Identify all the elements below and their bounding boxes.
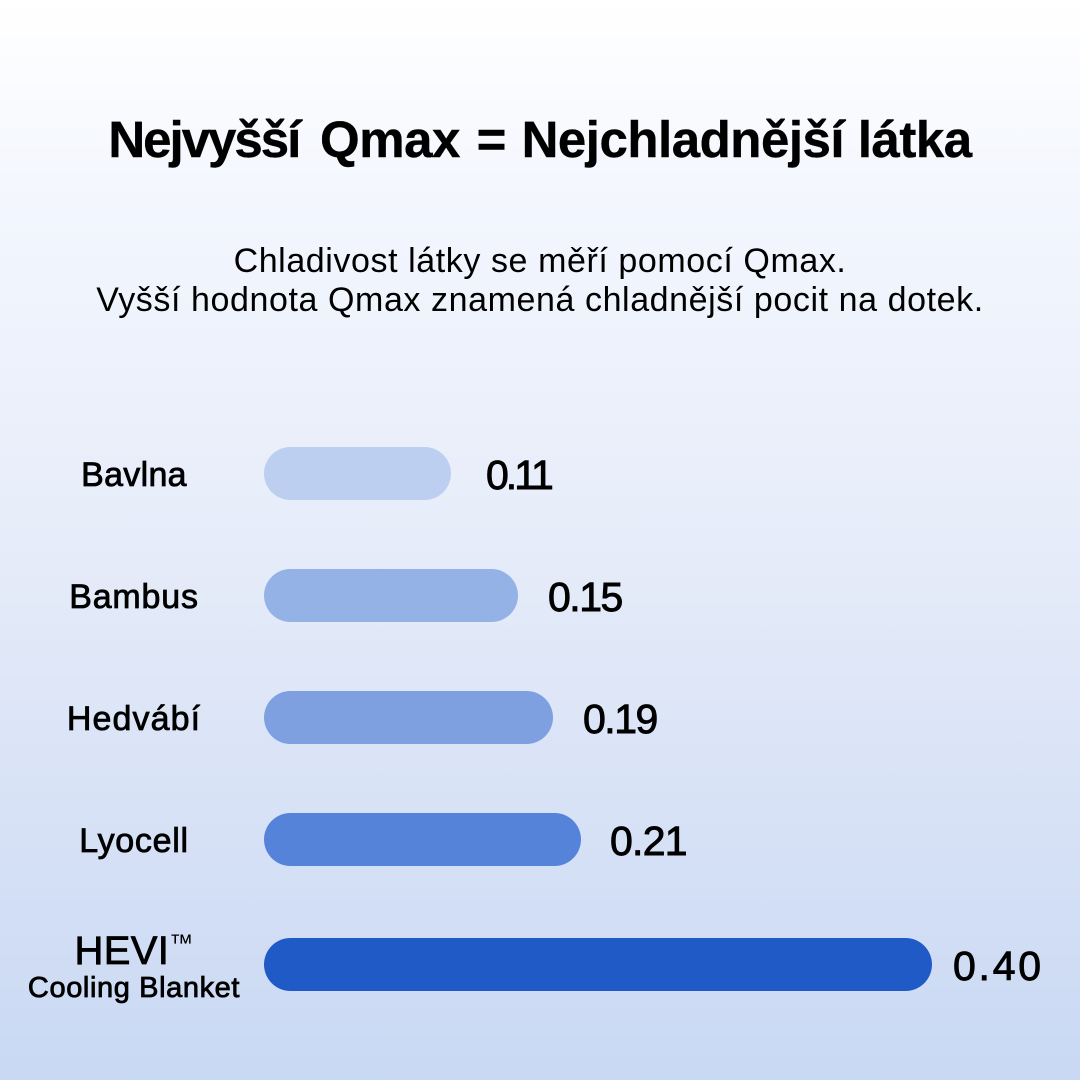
bar: Hedvábí	[264, 691, 553, 744]
value: 0.21: 0.21	[610, 818, 687, 864]
label: Hedvábí: Hedvábí	[67, 700, 201, 738]
row: Hedvábí	[67, 691, 657, 744]
label: HEVI Cooling Blanket	[28, 929, 240, 1004]
label: Bavlna: Bavlna	[81, 456, 187, 494]
row: Lyocell	[79, 813, 687, 866]
label: Lyocell: Lyocell	[79, 822, 189, 860]
bar: Lyocell	[264, 813, 581, 866]
bar: HEVI	[264, 938, 932, 991]
row: Bavlna	[81, 447, 552, 500]
intro text: Vyšší hodnota Qmax znamená chladnější pocit na dotek.	[96, 281, 984, 319]
label: HEVI Cooling Blanket: HEVI™	[75, 929, 193, 973]
label: Bambus: Bambus	[69, 578, 199, 616]
label: HEVI Cooling Blanket: Cooling Blanket	[28, 972, 240, 1004]
intro text	[96, 242, 984, 319]
bar: Bavlna	[264, 447, 451, 500]
intro text: Chladivost látky se měří pomocí Qmax.	[234, 242, 846, 280]
title: Nejvyšší Qmax = Nejchladnější látka	[108, 111, 972, 168]
value: 0.19: 0.19	[583, 696, 657, 742]
value: 0.40: 0.40	[953, 943, 1044, 989]
value: 0.11: 0.11	[486, 452, 551, 498]
bar chart	[28, 447, 1044, 1004]
bar: Bambus	[264, 569, 518, 622]
value: 0.15: 0.15	[548, 574, 622, 620]
row: HEVI Cooling Blanket	[28, 929, 1044, 1004]
row: Bambus	[69, 569, 622, 622]
